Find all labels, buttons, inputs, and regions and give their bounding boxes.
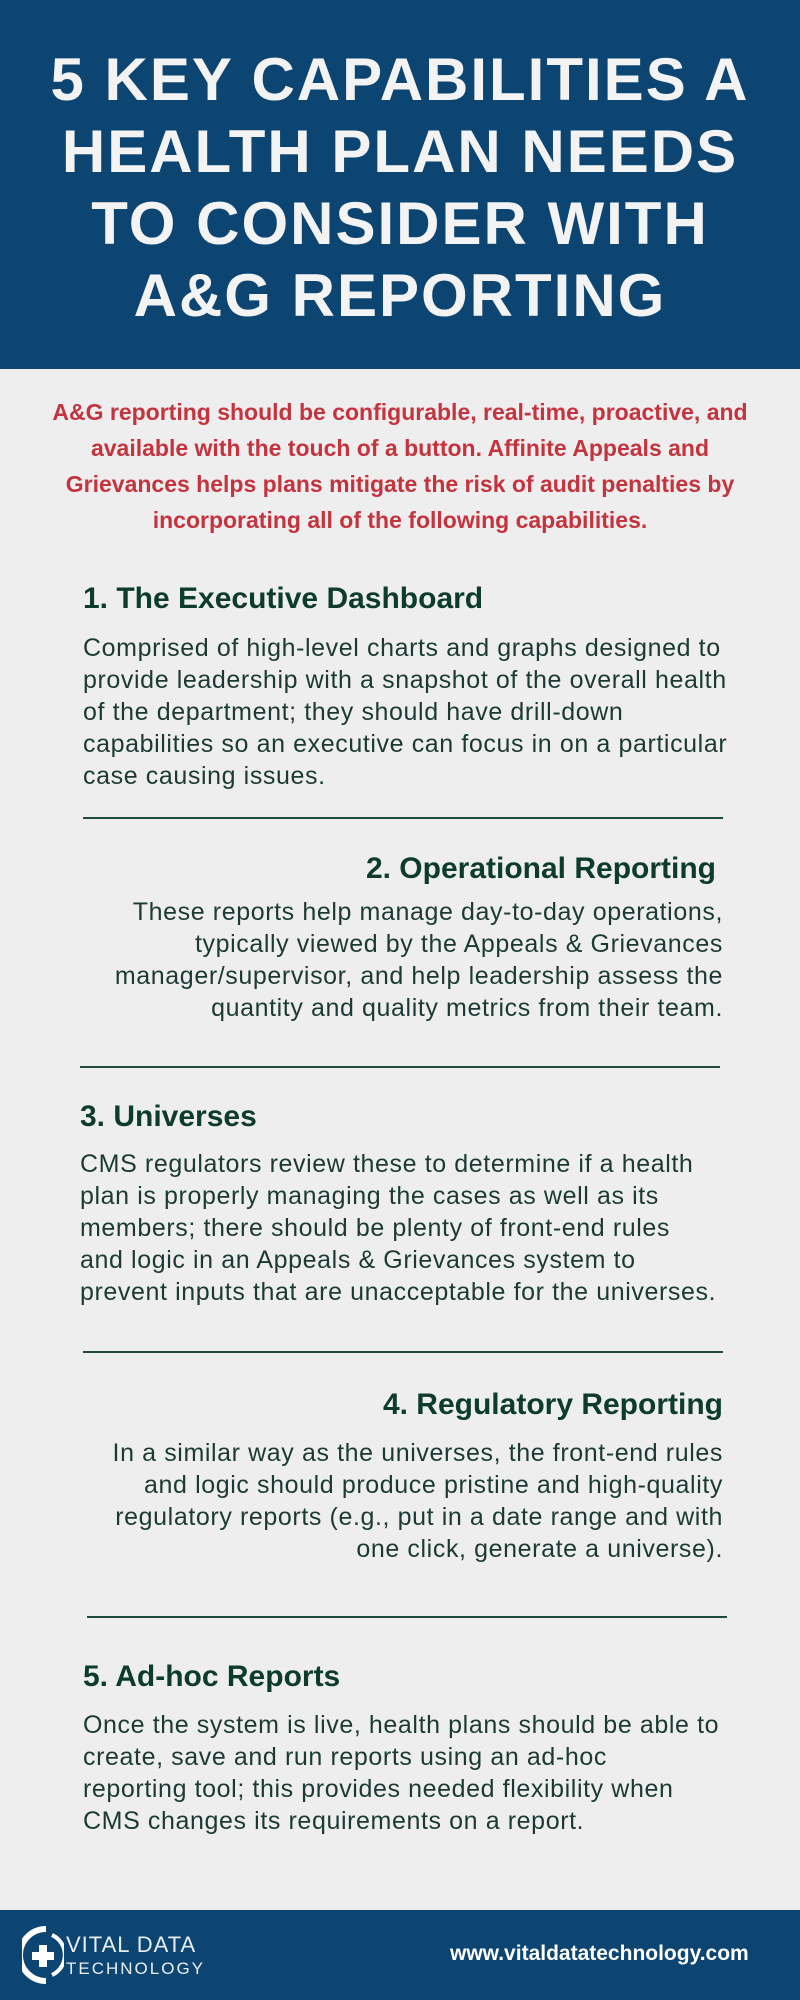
heading 5: 5. Ad-hoc Reports <box>83 1660 340 1693</box>
logo text <box>66 1932 205 1978</box>
body 5: CMS changes its requirements on a report. <box>83 1807 584 1835</box>
body 3: prevent inputs that are unacceptable for the universes. <box>80 1278 716 1306</box>
body 4: regulatory reports (e.g., put in a date range and with <box>115 1503 723 1531</box>
section 1 <box>83 582 727 790</box>
heading 2: 2. Operational Reporting <box>366 852 716 885</box>
body 4: one click, generate a universe). <box>356 1535 723 1563</box>
body 1: case causing issues. <box>83 762 326 790</box>
intro text <box>52 399 748 533</box>
section 4 <box>113 1388 723 1563</box>
intro text: incorporating all of the following capabilities. <box>153 507 647 533</box>
intro text: available with the touch of a button. Affinite Appeals and <box>91 435 709 461</box>
body 3 <box>80 1150 716 1306</box>
header banner <box>0 0 800 369</box>
body 5: create, save and run reports using an ad-hoc <box>83 1743 607 1771</box>
body 5: reporting tool; this provides needed flexibility when <box>83 1775 673 1803</box>
body 5: Once the system is live, health plans should be able to <box>83 1711 719 1739</box>
body 3: and logic in an Appeals & Grievances system to <box>80 1246 636 1274</box>
body 3: CMS regulators review these to determine if a health <box>80 1150 693 1178</box>
body 4: In a similar way as the universes, the front-end rules <box>113 1439 723 1467</box>
logo text: VITAL DATA <box>66 1932 196 1957</box>
section 3 <box>80 1100 716 1306</box>
website: www.vitaldatatechnology.com <box>450 1942 749 1965</box>
body 5 <box>83 1711 719 1835</box>
intro text: A&G reporting should be configurable, real-time, proactive, and <box>52 399 748 425</box>
body 2: These reports help manage day-to-day operations, <box>133 898 723 926</box>
section 2 <box>115 852 723 1022</box>
body 1: provide leadership with a snapshot of the overall health <box>83 666 727 694</box>
body 2: manager/supervisor, and help leadership assess the <box>115 962 723 990</box>
section 5 <box>83 1660 719 1835</box>
body 2: typically viewed by the Appeals & Grievances <box>195 930 723 958</box>
logo text: TECHNOLOGY <box>66 1959 205 1978</box>
body 3: members; there should be plenty of front-end rules <box>80 1214 670 1242</box>
title: 5 KEY CAPABILITIES A <box>50 46 750 113</box>
heading 4: 4. Regulatory Reporting <box>383 1388 723 1421</box>
body 2 <box>115 898 723 1022</box>
body 1: capabilities so an executive can focus in on a particular <box>83 730 727 758</box>
body 3: plan is properly managing the cases as well as its <box>80 1182 659 1210</box>
title: A&G REPORTING <box>134 262 666 329</box>
body 2: quantity and quality metrics from their team. <box>211 994 723 1022</box>
heading 1: 1. The Executive Dashboard <box>83 582 483 615</box>
heading 3: 3. Universes <box>80 1100 257 1133</box>
title <box>50 46 750 329</box>
body 4: and logic should produce pristine and high-quality <box>144 1471 723 1499</box>
body 4 <box>113 1439 723 1563</box>
intro text: Grievances helps plans mitigate the risk of audit penalties by <box>66 471 734 497</box>
footer <box>0 1910 800 2000</box>
title: TO CONSIDER WITH <box>91 190 709 257</box>
title: HEALTH PLAN NEEDS <box>62 118 738 185</box>
body 1: Comprised of high-level charts and graphs designed to <box>83 634 721 662</box>
logo icon <box>22 1926 64 1984</box>
body 1 <box>83 634 727 790</box>
body 1: of the department; they should have drill-down <box>83 698 623 726</box>
